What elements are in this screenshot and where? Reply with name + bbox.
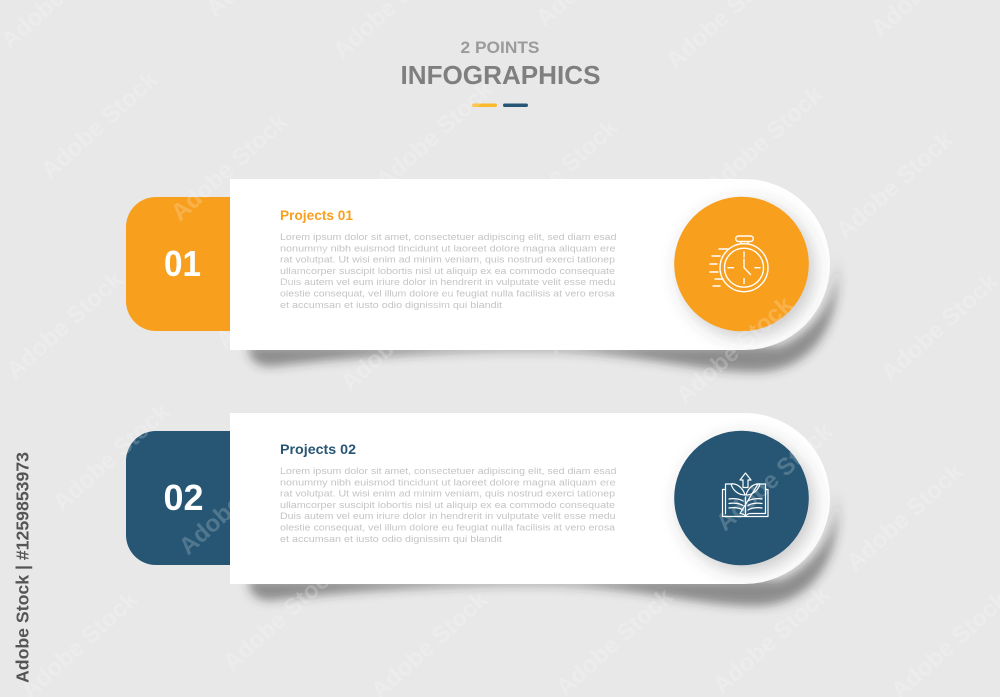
body text: Lorem ipsum dolor sit amet, consectetuer adipiscing elit, sed diam esad — [280, 232, 616, 243]
body text: nonummy nibh euismod tincidunt ut laoreet dolore magna aliquam ere — [280, 477, 616, 488]
body text: Duis autem vel eum iriure dolor in hendrerit in vulputate velit esse medu — [280, 277, 616, 288]
watermarks: Adobe Stock — [336, 278, 464, 396]
body text: Lorem ipsum dolor sit amet, consectetuer adipiscing elit, sed diam esad — [280, 466, 616, 477]
blue circle — [674, 431, 809, 565]
icon: stopwatch — [710, 236, 768, 292]
circle shadow — [680, 437, 814, 571]
number tab 01 — [126, 197, 232, 331]
watermarks: Adobe Stock — [371, 76, 499, 194]
watermarks: Adobe Stock — [671, 291, 799, 409]
body text — [280, 232, 616, 311]
watermarks: Adobe Stock — [831, 126, 959, 244]
watermarks: Adobe Stock — [48, 398, 176, 516]
body text: rat volutpat. Ut wisi enim ad minim veniam, quis nostrud exerci tationep — [280, 489, 615, 500]
accent dash: yellow — [472, 104, 497, 107]
watermarks: Adobe Stock — [166, 108, 294, 226]
watermarks: Adobe Stock — [36, 66, 164, 184]
watermarks: Adobe Stock — [218, 558, 346, 676]
icon: open book with plant — [722, 473, 768, 516]
number tab 02 — [126, 431, 232, 565]
watermarks: Adobe Stock — [174, 442, 302, 560]
card shadow — [248, 484, 838, 606]
watermarks: Adobe Stock — [711, 418, 839, 536]
watermarks: Adobe Stock — [378, 412, 506, 530]
body text: olestie consequat, vel illum dolore eu feugiat nulla facilisis at vero erosa — [280, 522, 616, 534]
watermarks: Adobe Stock — [708, 581, 836, 697]
watermarks: Adobe Stock — [876, 268, 1000, 386]
title block — [400, 39, 600, 107]
vertical stock id: Adobe Stock | #1259853973 — [12, 452, 32, 683]
watermarks: Adobe Stock — [496, 114, 624, 232]
body text — [280, 466, 616, 545]
subtitle: 2 points: 2 POINTS — [460, 39, 540, 57]
panel: project 01 — [126, 179, 838, 372]
watermarks: Adobe Stock — [211, 236, 339, 354]
heading: projects 01: Projects 01 — [280, 208, 353, 223]
watermarks: Adobe Stock — [1, 266, 129, 384]
body text: olestie consequat, vel illum dolore eu feugiat nulla facilisis at vero erosa — [280, 288, 616, 300]
heading: infographics: INFOGRAPHICS — [400, 60, 600, 90]
watermarks: Adobe Stock — [506, 452, 634, 570]
body text: et accumsan et iusto odio dignissim qui blandit — [280, 534, 502, 545]
orange circle — [674, 197, 809, 331]
body text: ullamcorper suscipit lobortis nisl ut aliquip ex ea commodo consequate — [280, 500, 615, 511]
body text: Duis autem vel eum iriure dolor in hendrerit in vulputate velit esse medu — [280, 511, 616, 522]
watermarks: Adobe Stock — [541, 241, 669, 359]
body text: rat volutpat. Ut wisi enim ad minim veniam, quis nostrud exerci tationep — [280, 255, 615, 266]
body text: nonummy nibh euismod tincidunt ut laoreet dolore magna aliquam ere — [280, 243, 616, 254]
body text: et accumsan et iusto odio dignissim qui blandit — [280, 300, 502, 311]
card shadow — [248, 250, 838, 372]
panel: project 02 — [126, 413, 838, 606]
accent dash: blue — [503, 104, 528, 107]
body text: ullamcorper suscipit lobortis nisl ut aliquip ex ea commodo consequate — [280, 266, 615, 277]
watermarks: Adobe Stock — [701, 81, 829, 199]
watermarks: Adobe Stock — [841, 458, 969, 576]
white card — [230, 413, 830, 584]
number tab 02: 02 — [164, 477, 204, 518]
number tab 01: 01 — [164, 243, 201, 284]
circle shadow — [680, 203, 814, 337]
white card — [230, 179, 830, 350]
heading: projects 02: Projects 02 — [280, 442, 356, 457]
